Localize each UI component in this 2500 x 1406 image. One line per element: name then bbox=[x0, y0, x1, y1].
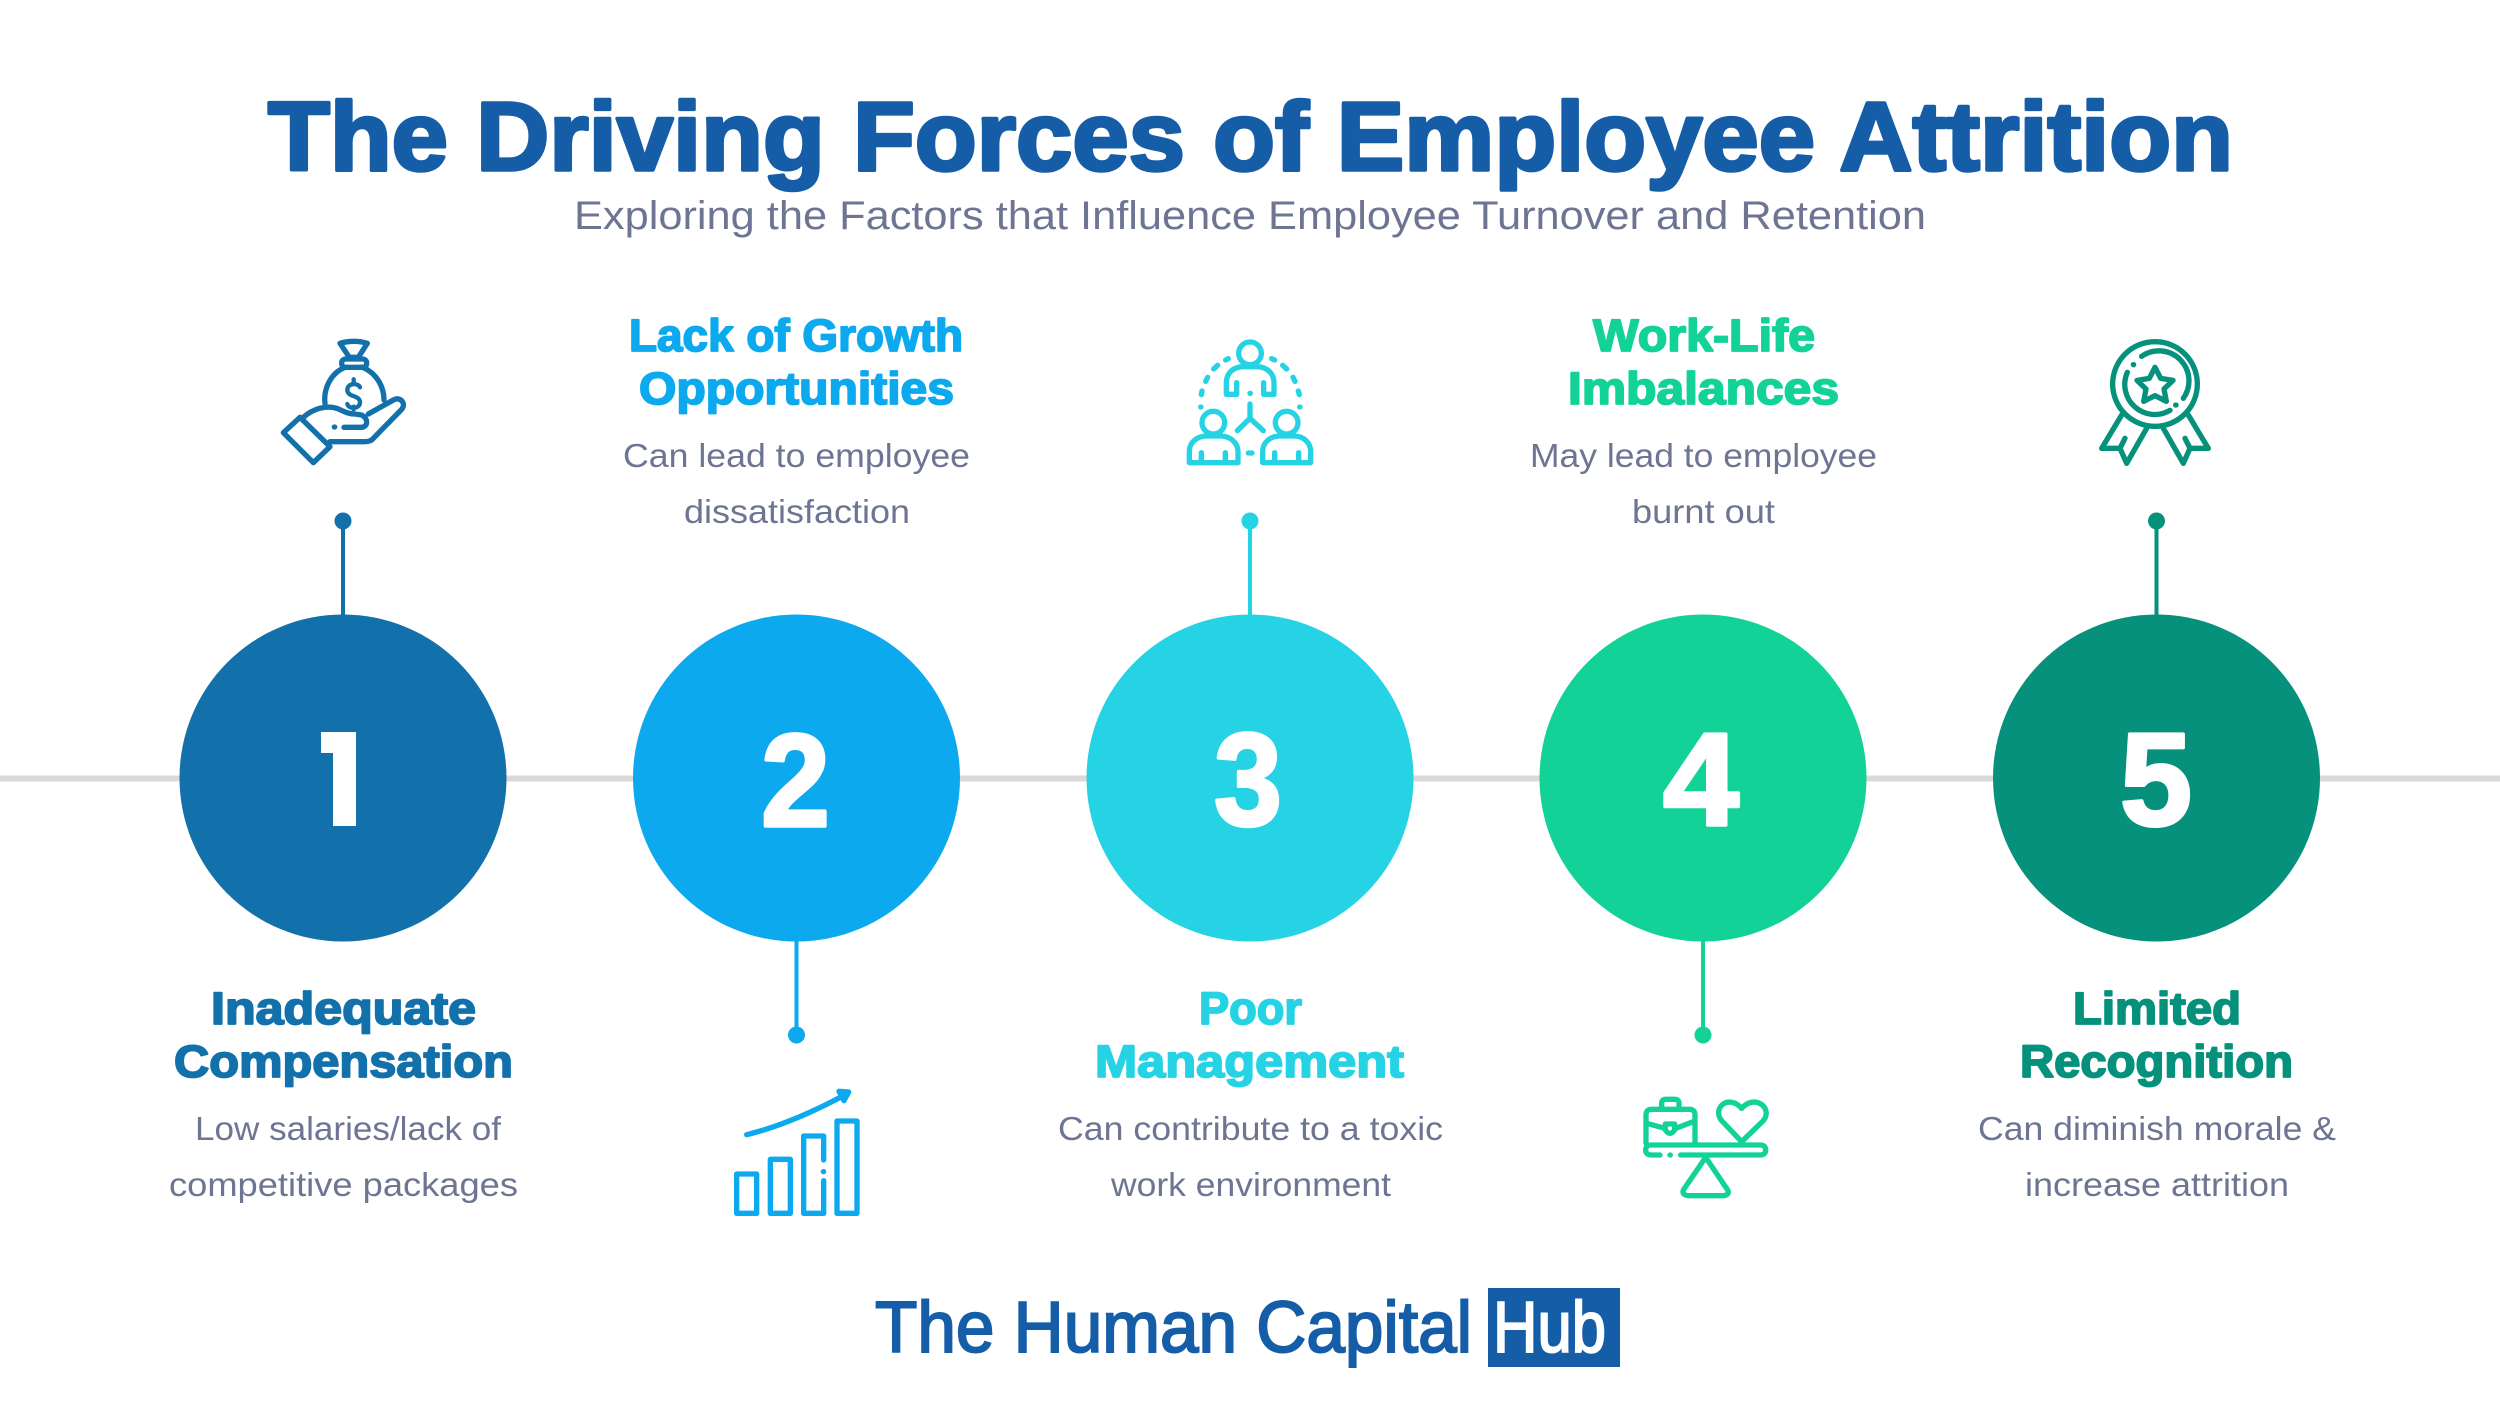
panel: 5 Limited Recognition bbox=[1978, 342, 2336, 1203]
description 3: Can contribute to a toxic bbox=[1058, 1110, 1443, 1147]
number circle 3 bbox=[1086, 614, 1414, 942]
logo: The Human Capital Hub: The Human Capital bbox=[875, 1288, 1472, 1368]
heading 5: Limited bbox=[2073, 983, 2241, 1034]
description 2: dissatisfaction bbox=[684, 493, 910, 530]
heading 1 bbox=[174, 983, 513, 1087]
heading 4: Work-Life bbox=[1593, 310, 1815, 361]
heading 5: Recognition bbox=[2020, 1036, 2293, 1087]
heading 5 bbox=[2020, 983, 2293, 1087]
heading 3 bbox=[1095, 983, 1404, 1087]
heading 1: Compensation bbox=[174, 1036, 513, 1087]
icon: team hierarchy bbox=[1189, 342, 1311, 463]
logo: The Human Capital Hub: Hub bbox=[1493, 1288, 1606, 1368]
heading 1: Inadequate bbox=[211, 983, 476, 1034]
heading 3: Management bbox=[1095, 1036, 1404, 1087]
heading 4 bbox=[1568, 310, 1839, 414]
connector 2 bbox=[788, 940, 805, 1044]
description 2: Can lead to employee bbox=[623, 437, 970, 474]
description 4 bbox=[1530, 437, 1877, 530]
timeline line bbox=[0, 776, 2500, 782]
heading 2: Opportunities bbox=[639, 363, 954, 414]
number circle 2: 2 bbox=[761, 707, 830, 854]
description 4: May lead to employee bbox=[1530, 437, 1877, 474]
number circle 2 bbox=[633, 614, 960, 942]
connector 4 bbox=[1694, 940, 1712, 1044]
heading 2 bbox=[629, 310, 963, 414]
number circle 4: 4 bbox=[1663, 706, 1739, 853]
icon: rising bar chart bbox=[737, 1091, 857, 1213]
number circle 4 bbox=[1540, 614, 1866, 942]
number circle 3: 3 bbox=[1214, 706, 1282, 853]
description 1: competitive packages bbox=[169, 1166, 518, 1203]
number circle 1 bbox=[180, 614, 506, 942]
description 5 bbox=[1978, 1110, 2336, 1203]
subtitle: Exploring the Factors that Influence Employee Turnover and Retention bbox=[574, 194, 1926, 238]
number circle 1: 1 bbox=[316, 707, 362, 854]
description 5: increase attrition bbox=[2025, 1166, 2289, 1203]
description 1 bbox=[169, 1110, 518, 1203]
title: The Driving Forces of Employee Attrition bbox=[268, 82, 2233, 191]
heading 4: Imbalances bbox=[1568, 363, 1839, 414]
description 3: work environment bbox=[1110, 1166, 1391, 1203]
icon: award ribbon bbox=[2102, 342, 2208, 463]
panel: 2 Lack of Growth Opportunities bbox=[623, 310, 970, 1213]
description 2 bbox=[623, 437, 970, 530]
panel: 4 Work-Life Imbalances bbox=[1530, 310, 1877, 1196]
icon: hand holding money bag bbox=[283, 341, 403, 463]
connector 1 bbox=[334, 512, 352, 616]
description 4: burnt out bbox=[1632, 493, 1775, 530]
connector 5 bbox=[2148, 512, 2165, 616]
description 5: Can diminish morale & bbox=[1978, 1110, 2336, 1147]
number circle 5: 5 bbox=[2120, 706, 2192, 853]
panel: 1 Inadequate Compensation bbox=[169, 341, 518, 1203]
panel: 3 Poor Management bbox=[1058, 342, 1443, 1203]
number circle 5 bbox=[1993, 614, 2320, 942]
heading 2: Lack of Growth bbox=[629, 310, 963, 361]
description 3 bbox=[1058, 1110, 1443, 1203]
icon: work-life balance scale bbox=[1646, 1099, 1766, 1196]
description 1: Low salaries/lack of bbox=[195, 1110, 502, 1147]
connector 3 bbox=[1242, 512, 1258, 616]
heading 3: Poor bbox=[1199, 983, 1302, 1034]
